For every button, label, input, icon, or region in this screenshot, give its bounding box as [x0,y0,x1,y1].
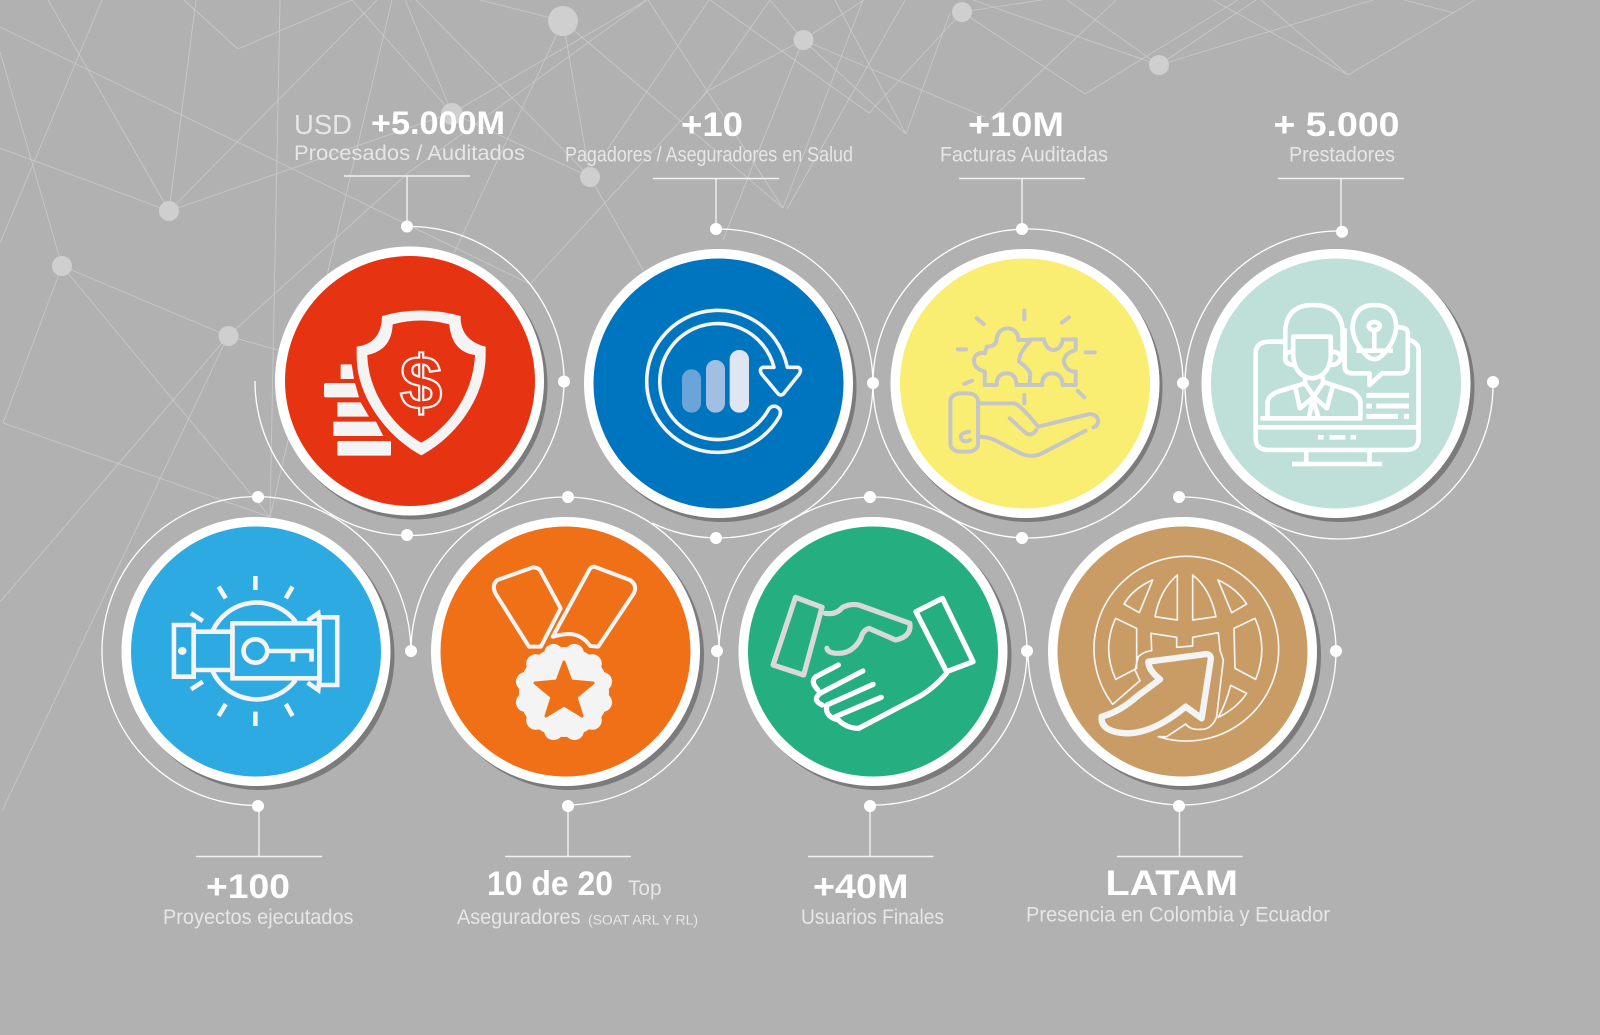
panel: light blue disc with key [122,517,394,790]
stat: 10 de 20 Top: 10 de 20 [487,865,613,903]
stat: LATAM [1026,864,1330,926]
stat: 10 de 20 Top [457,865,698,929]
stat: +10M: Facturas Auditadas [940,144,1108,166]
connector dots [252,220,1499,812]
icon: medal [494,567,635,740]
icon: shield and coins [324,310,486,456]
icon: key in hands with rays [174,576,337,726]
panel: blue disc with cycle chart [584,249,856,522]
icon: cycle arrow with bars [647,310,800,452]
stat: +100: Proyectos ejecutados [163,906,354,929]
stat: USD +5.000M: USD [294,109,352,140]
stat: + 5.000: + 5.000 [1274,106,1400,144]
panel: teal disc with monitor [1202,249,1474,522]
stat: +10M [940,106,1108,166]
stat: 10 de 20 Top: Aseguradores [457,906,580,929]
icon: handshake [773,597,973,728]
icon: globe with arrow [1094,556,1279,741]
stat: USD +5.000M: Procesados / Auditados [294,142,525,165]
panel: red disc with shield [275,246,548,520]
connector lines [196,176,1404,856]
panel: orange disc with medal [431,517,704,790]
stat: LATAM: Presencia en Colombia y Ecuador [1026,904,1330,926]
stat: LATAM: LATAM [1106,864,1238,903]
network background pattern [0,0,1475,811]
stat: 10 de 20 Top: (SOAT ARL Y RL) [588,912,698,928]
stat: +10: Pagadores / Aseguradores en Salud [565,144,853,166]
panel: brown disc with globe [1048,517,1321,790]
stat: +100 [163,868,354,929]
stat: + 5.000 [1274,106,1400,166]
stat: 10 de 20 Top: Top [628,877,662,900]
stat: +40M [801,868,944,929]
stat: +40M: Usuarios Finales [801,906,944,929]
panel: green disc with handshake [738,517,1012,790]
orbit rings [102,226,1493,805]
icon: shield and coins: $ [400,341,442,426]
icon: monitor with person and idea [1256,305,1419,464]
icon: hand holding puzzle [950,311,1098,456]
stat: +10: +10 [681,106,743,144]
stat: +100: +100 [206,868,290,906]
stat: +10M: +10M [968,106,1064,144]
stat: +40M: +40M [813,868,908,906]
panel: yellow disc with puzzle [890,249,1162,522]
stat: +10 [565,106,853,166]
stat: + 5.000: Prestadores [1289,144,1395,166]
stat: USD +5.000M [294,105,525,165]
stat: USD +5.000M: +5.000M [371,105,505,141]
